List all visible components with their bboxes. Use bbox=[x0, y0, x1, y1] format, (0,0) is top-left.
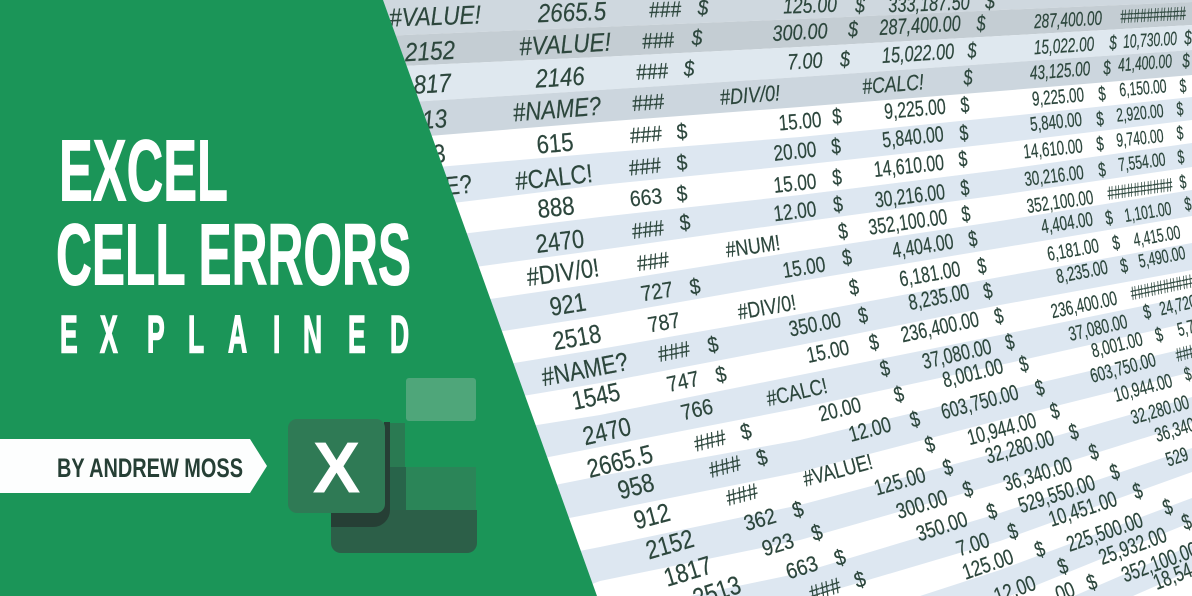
table row 4: 2513 bbox=[395, 105, 449, 137]
table row 19: $ bbox=[1086, 440, 1102, 466]
table row 8: ### bbox=[631, 216, 666, 244]
table row 5: 9,225.00 bbox=[1031, 84, 1085, 110]
table row 12: $ bbox=[705, 332, 721, 358]
table row 21: $ bbox=[1130, 479, 1146, 505]
table row 6: 5,840.00 bbox=[1029, 108, 1083, 136]
table row 17: $ bbox=[1048, 399, 1063, 425]
table row 16: 12.00 bbox=[846, 413, 894, 447]
table row 4: #NAME? bbox=[512, 92, 603, 128]
spreadsheet row bands bbox=[380, 0, 1192, 596]
table row 8: 30,216.00 bbox=[1023, 161, 1085, 191]
title line: EXPLAINED: EXPLAINED bbox=[60, 304, 409, 364]
table row 15: 2665.5 bbox=[584, 440, 656, 484]
table row 16: 603,750.00 bbox=[939, 381, 1021, 425]
table row 7: $ bbox=[1176, 124, 1185, 144]
table row 2: 2152 bbox=[403, 36, 456, 68]
table row 3: 2146 bbox=[534, 62, 586, 94]
table row 15: ### bbox=[692, 425, 729, 457]
title bbox=[56, 122, 411, 364]
author ribbon bbox=[0, 439, 267, 493]
table row 5: 15.00 bbox=[778, 108, 822, 136]
table row 8: 2470 bbox=[534, 225, 586, 259]
table row 5: $ bbox=[676, 119, 689, 145]
table row 3: 1817 bbox=[400, 69, 453, 101]
table row 18: 362 bbox=[741, 504, 779, 536]
table row 7: 15.00 bbox=[772, 170, 818, 198]
table row 9: $ bbox=[1178, 172, 1188, 193]
table row 7: $ bbox=[957, 148, 969, 172]
table row 14: $ bbox=[1003, 330, 1017, 356]
table row 2: $ bbox=[975, 11, 987, 37]
table row 7: $ bbox=[831, 165, 843, 191]
title line: EXCEL: EXCEL bbox=[59, 122, 228, 220]
table row 18 bbox=[643, 391, 1192, 566]
table row 6: 20.00 bbox=[772, 138, 818, 166]
table row 9: #NUM! bbox=[724, 231, 782, 263]
table row 24: $ bbox=[1083, 570, 1101, 596]
table row 20: $ bbox=[984, 499, 1000, 525]
table row 15: $ bbox=[1153, 323, 1166, 347]
table row 8: $ bbox=[959, 176, 971, 201]
table row 7: 888 bbox=[536, 192, 576, 224]
table row 17: 912 bbox=[631, 498, 673, 536]
table row 18: 125.00 bbox=[871, 463, 929, 501]
table row 13: $ bbox=[992, 304, 1006, 330]
table row 20: 663 bbox=[783, 551, 821, 585]
table row 8: $ bbox=[1176, 148, 1186, 168]
table row 3 bbox=[400, 27, 1192, 101]
table row 3: $ bbox=[1108, 32, 1118, 54]
table row 18: 32,280.00 bbox=[983, 427, 1057, 469]
table row 8: 7,554.00 bbox=[1117, 150, 1167, 176]
table row 9: ########## bbox=[1106, 175, 1174, 205]
table row 1 bbox=[389, 0, 996, 33]
table row 5: $ bbox=[960, 94, 971, 118]
table row 7: 14,610.00 bbox=[1022, 135, 1084, 163]
table row 19: 923 bbox=[759, 529, 797, 561]
table row 8: 30,216.00 bbox=[874, 181, 946, 213]
table row 5: 1473 bbox=[395, 139, 447, 173]
logo lower block bbox=[331, 510, 477, 553]
table row 18: 32,280.00 bbox=[1128, 391, 1192, 429]
table row 16: $ bbox=[754, 445, 771, 471]
table row 16 bbox=[615, 342, 1192, 506]
table row 9: 352,100.00 bbox=[867, 206, 949, 240]
table row 12: 8,235.00 bbox=[906, 280, 972, 316]
table row 10: 727 bbox=[639, 277, 675, 307]
table row 17: $ bbox=[922, 432, 938, 458]
table row 11: 2518 bbox=[551, 319, 603, 357]
table row 13 bbox=[569, 271, 1192, 416]
table row 13: 236,400.00 bbox=[899, 308, 981, 348]
table row 19: 300.00 bbox=[893, 486, 951, 524]
table row 12: $ bbox=[981, 279, 995, 305]
table row 9: $ bbox=[960, 202, 972, 228]
table row 4 bbox=[395, 50, 1191, 137]
table row 20: 350.00 bbox=[913, 507, 971, 547]
table row 14: #CALC! bbox=[764, 374, 830, 412]
table row 2: ### bbox=[641, 28, 675, 54]
table row 6 bbox=[383, 100, 1185, 208]
table row 4: #CALC! bbox=[861, 70, 925, 100]
table row 7: 663 bbox=[629, 184, 663, 212]
table row 19: $ bbox=[960, 477, 976, 503]
table row 3: $ bbox=[966, 38, 978, 64]
table row 23 bbox=[991, 510, 1192, 596]
table row 4: $ bbox=[962, 65, 975, 91]
table row 5: 6,150.00 bbox=[1119, 77, 1168, 101]
table row 12: ### bbox=[656, 337, 692, 367]
table row 19: 36,340.00 bbox=[1001, 453, 1075, 497]
table row 4: $ bbox=[1181, 50, 1191, 72]
table row 24 bbox=[1048, 538, 1192, 596]
table row 6: $ bbox=[1095, 107, 1105, 130]
table row 16: $ bbox=[907, 407, 923, 433]
table row 2: $ bbox=[690, 25, 703, 51]
table row 14: $ bbox=[878, 356, 892, 382]
table row 6: 2,920.00 bbox=[1115, 101, 1165, 127]
table row 10: 15.00 bbox=[781, 253, 827, 283]
table row 13: 1545 bbox=[569, 378, 623, 416]
logo letter X: X bbox=[312, 428, 361, 508]
table row 23: $ bbox=[1054, 554, 1072, 580]
table row 13: $ bbox=[713, 362, 729, 388]
table row 2: 287,400.00 bbox=[878, 11, 962, 41]
table row 14: 766 bbox=[679, 394, 715, 426]
table row 15: 20.00 bbox=[816, 393, 864, 427]
table row 16: ### bbox=[706, 451, 744, 483]
table row 15: $ bbox=[891, 382, 907, 408]
table row 6: ### bbox=[628, 153, 663, 181]
logo tile bbox=[288, 419, 385, 513]
table row 19: 1817 bbox=[661, 551, 715, 593]
table row 6: $ bbox=[675, 150, 689, 176]
icon: Excel logo bbox=[288, 378, 477, 553]
table row 9: 352,100.00 bbox=[1025, 186, 1095, 218]
table row 13: $ bbox=[867, 330, 881, 356]
table row 21: 10,451.00 bbox=[1046, 488, 1120, 532]
table row 21: 7.00 bbox=[953, 528, 993, 562]
table row 2: 300.00 bbox=[772, 20, 829, 46]
table row 12: 350.00 bbox=[787, 308, 843, 342]
table row 3: $ bbox=[682, 56, 696, 82]
table row 17 bbox=[631, 364, 1192, 536]
table row 10: $ bbox=[967, 227, 980, 253]
table row 20: 529 bbox=[1163, 443, 1191, 471]
table row 14: 37,080.00 bbox=[920, 335, 994, 375]
table row 6: #NAME? bbox=[383, 170, 473, 208]
table row 16: 603,750.00 bbox=[1088, 349, 1158, 387]
table row 21 bbox=[806, 479, 1146, 596]
table row 4: $ bbox=[1102, 57, 1112, 79]
table row 14: $ bbox=[1141, 300, 1154, 324]
table row 15: 8,001.00 bbox=[940, 355, 1006, 393]
table row 23: 25,932.00 bbox=[1096, 524, 1170, 570]
table row 8: $ bbox=[832, 192, 844, 218]
table row 17: #VALUE! bbox=[801, 450, 875, 492]
table row 7 bbox=[536, 124, 1185, 224]
table row 7: $ bbox=[675, 181, 689, 207]
table row 18: 2152 bbox=[643, 524, 697, 566]
table row 8 bbox=[534, 148, 1186, 259]
table row 3: 7.00 bbox=[787, 49, 824, 75]
table row 14: 37,080.00 bbox=[1066, 310, 1130, 346]
table row 20: $ bbox=[831, 545, 849, 571]
table row 5: $ bbox=[1097, 83, 1107, 105]
table row 11: $ bbox=[976, 254, 989, 280]
title line: CELL ERRORS: CELL ERRORS bbox=[56, 206, 411, 304]
table row 11: #DIV/0! bbox=[736, 291, 798, 325]
table row 3: $ bbox=[838, 48, 851, 72]
table row 3: 10,730.00 bbox=[1122, 29, 1178, 53]
table row 10: $ bbox=[840, 245, 854, 271]
table row 13: 236,400.00 bbox=[1049, 287, 1119, 323]
table row 17: ### bbox=[723, 479, 761, 511]
table row 9 bbox=[525, 172, 1188, 293]
table row 2: 287,400.00 bbox=[1033, 7, 1103, 33]
table row 4: 43,125.00 bbox=[1029, 58, 1091, 84]
table row 16: 958 bbox=[615, 468, 657, 506]
table row 22: $ bbox=[1031, 537, 1049, 563]
table row 13: 15.00 bbox=[804, 336, 852, 368]
table row 15: 8,001.00 bbox=[1089, 328, 1145, 362]
table row 6: $ bbox=[958, 122, 970, 146]
table row 15 bbox=[584, 317, 1192, 484]
table row 11: $ bbox=[1110, 231, 1122, 255]
table row 3: ### bbox=[635, 59, 669, 85]
table row 14: 2470 bbox=[580, 412, 634, 452]
table row 5: $ bbox=[1179, 77, 1187, 97]
table row 18: $ bbox=[1066, 420, 1082, 446]
table row 10: $ bbox=[1104, 206, 1115, 230]
table row 6: #CALC! bbox=[514, 159, 594, 197]
table row 19: $ bbox=[808, 520, 826, 546]
table row 12: $ bbox=[1118, 254, 1130, 278]
table row 22: 225,500.00 bbox=[1064, 509, 1146, 557]
table row 9: $ bbox=[837, 219, 849, 245]
table row 4: #DIV/0! bbox=[719, 82, 781, 110]
table row 22: 125.00 bbox=[959, 545, 1017, 585]
table row 8: 12.00 bbox=[772, 197, 818, 227]
table row 22 bbox=[959, 495, 1176, 585]
table row 20: 529,550.00 bbox=[1016, 471, 1098, 519]
table row 5: 615 bbox=[535, 128, 575, 160]
table row 1: #VALUE! bbox=[389, 1, 482, 33]
table row 20 bbox=[689, 443, 1191, 596]
table row 9: #DIV/0! bbox=[525, 253, 601, 293]
table row 22: $ bbox=[1160, 495, 1176, 521]
table row 13: 747 bbox=[665, 367, 701, 397]
table row 3: 15,022.00 bbox=[881, 39, 955, 69]
table row 8: $ bbox=[1097, 158, 1107, 182]
table row 11 bbox=[551, 223, 1182, 357]
table row 10: 4,404.00 bbox=[891, 230, 955, 264]
table row 14 bbox=[580, 292, 1192, 452]
table row 20: $ bbox=[1107, 460, 1123, 486]
table row 18: $ bbox=[940, 455, 956, 481]
table row 2: $ bbox=[846, 18, 859, 42]
table row 7: $ bbox=[1095, 132, 1105, 155]
logo shadow bbox=[331, 422, 390, 527]
table row 18: $ bbox=[790, 497, 807, 523]
table row 12: #NAME? bbox=[539, 347, 631, 393]
table row 6: $ bbox=[830, 134, 842, 160]
panel: green diagonal bbox=[0, 0, 597, 596]
table row 17: 10,944.00 bbox=[965, 409, 1039, 451]
table row 12: 5,490.00 bbox=[1137, 244, 1187, 272]
table row 7: 9,740.00 bbox=[1115, 126, 1165, 152]
table row 10 bbox=[548, 194, 1192, 322]
table row 5 bbox=[395, 77, 1187, 173]
table row 11: 6,181.00 bbox=[1045, 234, 1101, 266]
table row 12: 8,235.00 bbox=[1054, 256, 1110, 288]
table row 10: 1,101.00 bbox=[1123, 199, 1173, 227]
table row 11: $ bbox=[847, 275, 861, 301]
table row 16: $ bbox=[1033, 376, 1048, 402]
table row 12 bbox=[539, 244, 1187, 393]
table row 11: 787 bbox=[646, 308, 682, 338]
table row 10: 921 bbox=[548, 288, 588, 322]
table row 11: 6,181.00 bbox=[898, 258, 962, 292]
table row 19 bbox=[661, 413, 1192, 593]
table row 3: 15,022.00 bbox=[1033, 33, 1095, 59]
table row 6: $ bbox=[1176, 100, 1185, 120]
table row 7: 14,610.00 bbox=[873, 151, 945, 183]
table row 5: 9,225.00 bbox=[883, 95, 947, 125]
table row 4: 41,400.00 bbox=[1117, 52, 1173, 76]
table row 6: 5,840.00 bbox=[881, 123, 945, 153]
table row 17: 10,944.00 bbox=[1111, 370, 1175, 406]
table row 15: $ bbox=[1017, 352, 1031, 378]
table row 21: $ bbox=[851, 567, 869, 593]
table row 15: $ bbox=[738, 419, 755, 445]
table row 5: $ bbox=[831, 104, 843, 130]
table row 10: 4,404.00 bbox=[1039, 208, 1095, 238]
table row 12: $ bbox=[856, 303, 870, 329]
table row 4: ### bbox=[631, 89, 665, 116]
table row 2: #VALUE! bbox=[518, 28, 612, 62]
table row 10: $ bbox=[688, 274, 703, 300]
table row 2 bbox=[403, 4, 1186, 68]
table row 8: $ bbox=[678, 210, 692, 236]
table row 21: $ bbox=[1005, 519, 1021, 545]
table row 11: 4,415.00 bbox=[1132, 223, 1182, 251]
author name: BY ANDREW MOSS bbox=[57, 453, 243, 483]
table row 2: ########## bbox=[1120, 4, 1186, 28]
table row 5: ### bbox=[629, 121, 663, 149]
table row 9: ### bbox=[635, 248, 671, 276]
